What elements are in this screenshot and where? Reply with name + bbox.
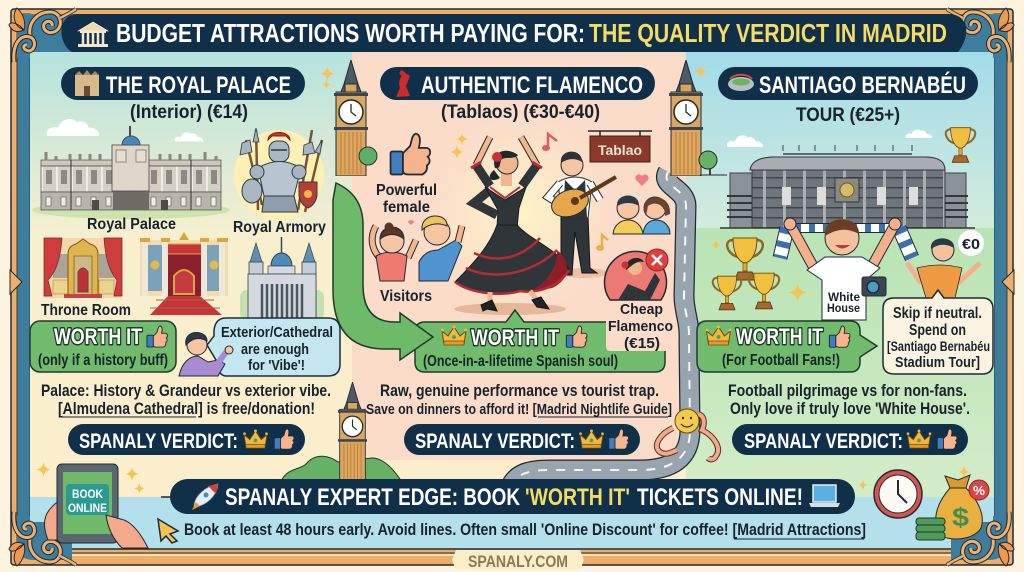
text: royal armory label: Royal Armory [233,219,326,236]
icon: tablao sign: Tablao [598,142,642,158]
icon: smiley hiker on road [657,409,718,459]
panel: bernabeu sky background [686,52,994,229]
icon: big ben right [669,60,703,176]
icon: money bag and coins [916,466,989,540]
callout: worth it right [697,321,877,372]
icon: money bag and coins: % [973,483,985,498]
title text: THE QUALITY VERDICT IN MADRID [589,18,947,48]
footer brand: SPANALY.COM [468,552,568,571]
icon: large thumbs up [391,134,430,174]
icon: tablet book online: BOOK [72,489,104,501]
icon: football fan with scarf [780,218,912,320]
icon: wall clock [858,470,922,518]
icon: stadium [720,145,975,228]
panel: bernabeu ground background [686,228,994,498]
icon: guitarist [548,152,616,278]
text: banner headline [225,484,803,511]
icon: thumbs up [147,326,167,347]
icon: throne room [44,238,122,298]
callout: speech bubble exterior: Exterior/Cathedral [221,324,333,341]
verdict pill middle [404,424,640,455]
icon: tablet book online: ONLINE [68,503,107,515]
icon: cheap flamenco warning [604,249,668,300]
text: cheap flamenco label: Flamenco [608,318,673,335]
title banner [61,14,966,52]
text: flamenco price: (Tablaos) (€30-€40) [441,102,600,123]
text: cheap flamenco label [608,301,673,352]
callout: worth it right: (For Football Fans!) [722,352,840,369]
text: palace summary: [Almudena Cathedral] is free/donation! [58,400,315,418]
text: royal palace label: Royal Palace [87,216,176,233]
callout: skip if neutral: Skip if neutral. [893,305,982,322]
icon: tablet book online [44,464,148,548]
icon: decorative stars left [36,66,335,494]
icon: person pointing [179,332,233,376]
icon: clouds right [694,65,932,147]
icon: small tree [699,151,727,175]
panel: bottom strip background [30,497,994,549]
icon: cursor [158,519,178,543]
text: palace summary: Palace: History & Grandeur vs exterior vibe. [41,382,331,400]
text: palace summary [41,382,331,418]
text: booking advice: Book at least 48 hours early. Avoid lines. Often small 'Online Discount' for coffee! [Madrid Attractions] [184,520,866,539]
text: cheap flamenco label: (€15) [624,335,660,352]
panel: bottom border bars [30,548,994,550]
callout: worth it middle: (Once-in-a-lifetime Spanish soul) [423,353,618,370]
text: flamenco summary: Raw, genuine performance vs tourist trap. [380,382,659,400]
panel: royal palace background [30,52,352,497]
callout: speech bubble exterior: are enough [241,341,309,358]
icon: small tree behind tower [359,147,377,165]
text: banner headline: SPANALY EXPERT EDGE: BOOK [225,484,521,511]
callout: worth it middle [415,310,665,372]
text: royal palace price: (Interior) (€14) [130,102,248,123]
icon: royal palace building [32,126,230,219]
icon: trophies group [711,238,807,310]
arrow: winding road [512,172,690,484]
icon: almudena cathedral [240,237,324,320]
icon: tablao sign [588,131,652,162]
text: banner headline: TICKETS ONLINE! [637,484,803,511]
text: flamenco summary [366,382,672,418]
callout: speech bubble exterior [207,318,340,376]
icon: rocket [192,484,218,510]
text: bernabeu price: TOUR (€25+) [796,104,900,126]
text: visitors label: Visitors [380,288,432,305]
text: powerful female [376,182,437,216]
callout: worth it left [30,321,176,372]
verdict pill right [732,424,968,455]
icon: football fan with scarf: House [827,303,860,315]
text: powerful female: female [383,199,430,216]
icon: throne hall [140,232,228,315]
icon: neutral shrugging person: €0 [962,236,980,253]
icon: couple with heart [613,174,670,234]
title text: BUDGET ATTRACTIONS WORTH PAYING FOR: [116,18,585,48]
text: cheap flamenco label: Cheap [620,301,663,318]
icon: neutral shrugging person [907,230,984,298]
text: powerful female: Powerful [376,182,437,199]
callout: worth it left: WORTH IT [54,324,142,349]
heading: authentic flamenco: AUTHENTIC FLAMENCO [421,72,643,99]
icon: laptop [809,485,840,507]
text: bernabeu summary: Football pilgrimage vs for non-fans. [728,382,967,400]
text: throne room label: Throne Room [41,302,131,319]
icon: visitors cheering [372,216,462,281]
callout: skip if neutral: Stadium Tour] [895,354,980,371]
callout: skip if neutral [883,290,993,374]
panel: patch behind cheap flamenco label [606,301,672,351]
icon: clouds left [46,119,203,142]
verdict pill middle: SPANALY VERDICT: [415,430,575,453]
heading: santiago bernabeu [718,67,978,100]
icon: big ben bottom [281,382,402,482]
verdict pill left: SPANALY VERDICT: [79,430,238,453]
callout: worth it left: (only if a history buff) [38,352,168,369]
text: banner headline: 'WORTH IT' [525,484,630,511]
icon: spotlight glow [428,115,612,315]
icon: money bag and coins: $ [952,502,970,532]
verdict pill right: SPANALY VERDICT: [744,430,903,453]
icon: royal armory knight [234,128,324,220]
icon: classical building [78,22,108,47]
text: bernabeu summary [728,382,970,418]
callout: worth it middle: WORTH IT [471,325,559,350]
icon: golden trophy [946,128,975,162]
callout: worth it right: WORTH IT [736,324,823,349]
icon: football fan with scarf: White [828,292,860,304]
icon: sparkles and music notes [450,133,608,251]
heading: the royal palace [61,67,305,100]
panel: flamenco background [352,52,686,460]
text: bernabeu summary: Only love if truly love 'White House'. [730,400,970,418]
panel: lower middle background [352,460,686,497]
heading: santiago bernabeu: SANTIAGO BERNABÉU [759,71,966,99]
title text [116,18,947,48]
text: flamenco summary: Save on dinners to afford it! [Madrid Nightlife Guide] [366,402,672,418]
callout: skip if neutral: Spend on [909,322,966,339]
callout: speech bubble exterior: for 'Vibe'! [248,357,305,374]
icon: flamenco dancer [454,137,569,315]
heading: authentic flamenco [380,67,655,100]
arrow: green curved arrow [333,183,433,360]
heading: the royal palace: THE ROYAL PALACE [106,72,291,99]
callout: skip if neutral: [Santiago Bernabéu [887,338,990,354]
verdict pill left [68,424,305,455]
icon: big ben left [334,60,368,176]
bottom banner [161,479,855,514]
